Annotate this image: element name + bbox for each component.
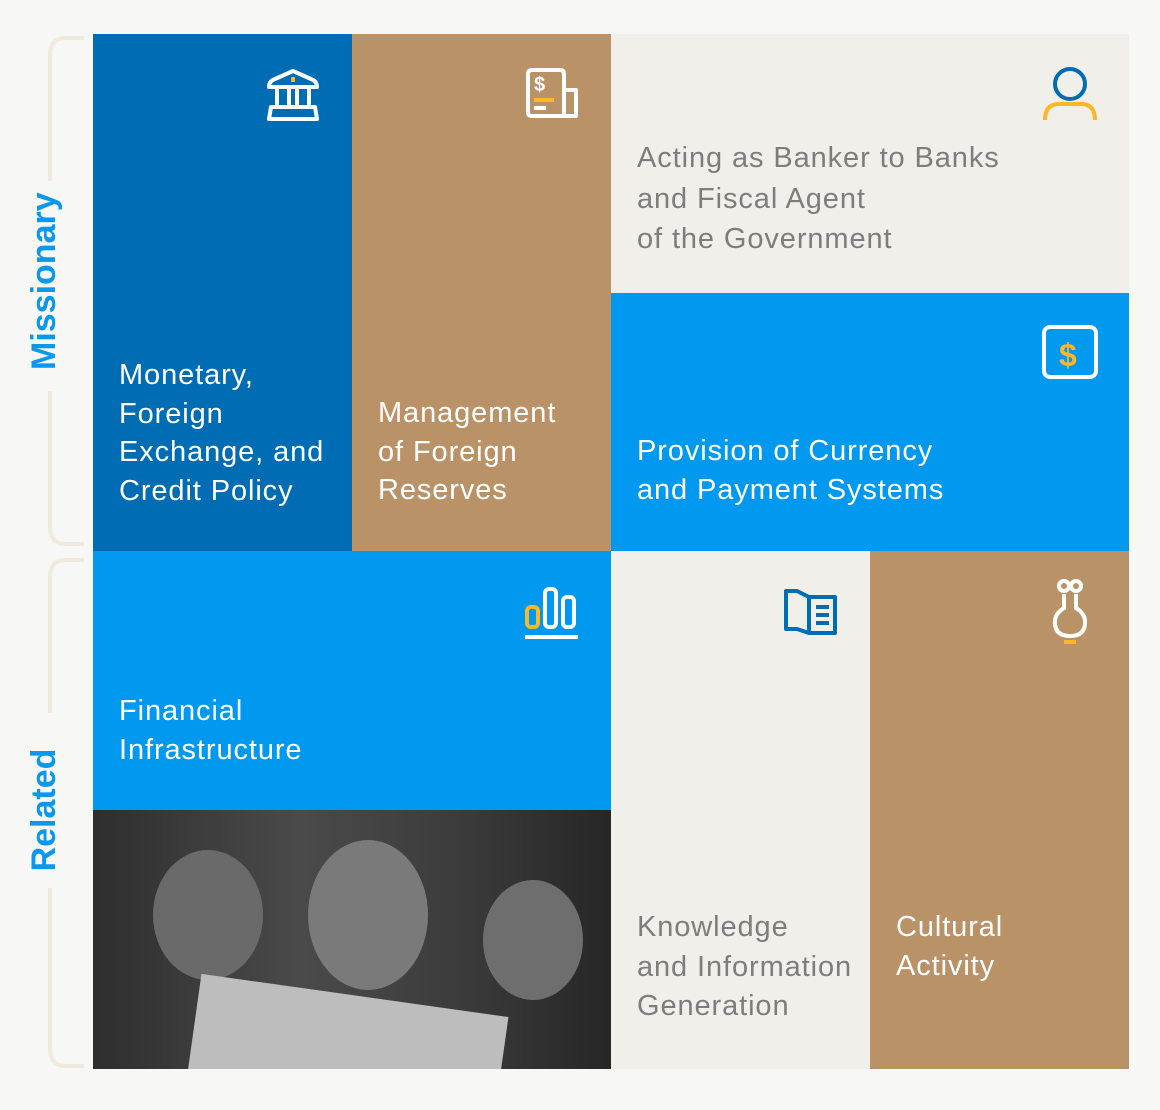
text (637, 911, 852, 1022)
icon: vase (1052, 579, 1088, 644)
text (119, 359, 324, 506)
panel: monetary policy (93, 34, 352, 551)
text: Monetary, (119, 359, 254, 391)
text: Cultural (896, 911, 1003, 943)
text: Foreign (119, 398, 224, 430)
text: and Payment Systems (637, 474, 944, 506)
text: Management (378, 397, 556, 429)
photo: people reading (93, 810, 611, 1069)
panel: foreign reserves (352, 34, 611, 551)
text (119, 695, 302, 766)
panel: financial infrastructure (93, 551, 611, 810)
text: Reserves (378, 474, 508, 506)
text: Financial (119, 695, 243, 727)
icon: book (784, 589, 837, 635)
icon: document (526, 68, 578, 118)
text: Knowledge (637, 911, 789, 943)
panel: banker to banks (611, 34, 1129, 293)
text: Provision of Currency (637, 435, 933, 467)
text (637, 435, 944, 506)
text: and Fiscal Agent (637, 182, 866, 214)
icon: document: $ (534, 74, 545, 96)
icon: bar chart (525, 587, 578, 639)
panel: knowledge (611, 551, 870, 1069)
panel: currency (611, 293, 1129, 551)
icon: bank (267, 69, 319, 121)
text: and Information (637, 950, 852, 982)
text: Generation (637, 990, 790, 1022)
text: Infrastructure (119, 734, 302, 766)
bracket: related (48, 558, 84, 1068)
text (896, 911, 1003, 982)
icon: dollar (1042, 325, 1098, 379)
panel: cultural activity (870, 551, 1129, 1069)
bracket: missionary (48, 36, 84, 546)
label: Missionary: Missionary (25, 192, 63, 370)
text: of the Government (637, 223, 892, 255)
text: Exchange, and (119, 436, 324, 468)
icon: dollar: $ (1059, 337, 1077, 373)
text: Activity (896, 950, 995, 982)
text: Acting as Banker to Banks (637, 142, 1000, 174)
text (637, 142, 1000, 255)
text (378, 397, 556, 506)
text: of Foreign (378, 436, 518, 468)
icon: person (1043, 67, 1097, 120)
label: Related: Related (25, 749, 63, 871)
text: Credit Policy (119, 474, 293, 506)
